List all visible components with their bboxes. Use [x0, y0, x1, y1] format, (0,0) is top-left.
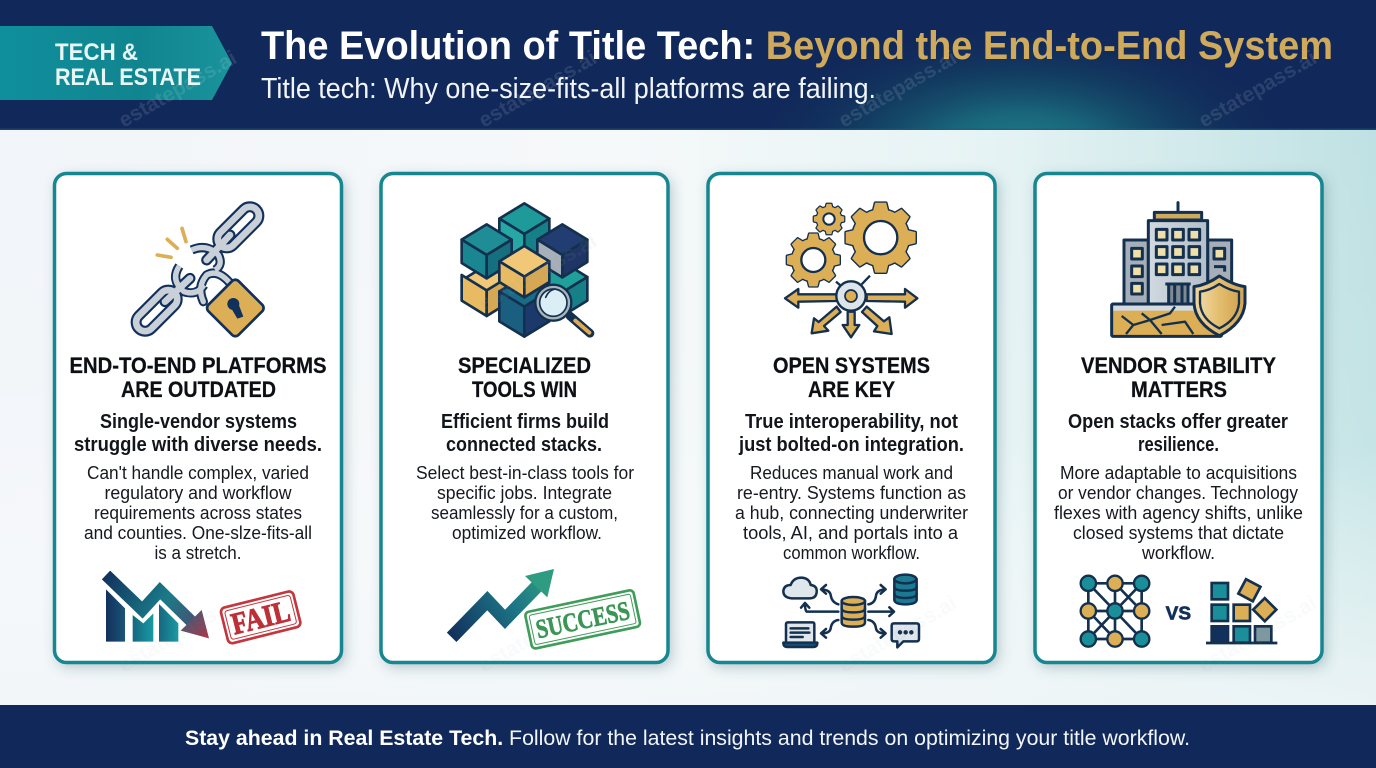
subheading	[1068, 410, 1288, 456]
footer band	[0, 705, 1376, 768]
body text	[735, 462, 968, 563]
watermarks: estatepass.ai	[475, 591, 601, 677]
icon: gears with radiating arrows	[785, 203, 917, 337]
icon: building on cracked ground with shield	[1112, 203, 1245, 336]
stacked blocks	[1206, 579, 1277, 643]
body text: common workflow.	[783, 542, 920, 563]
body text: tools, AI, and portals into a	[743, 522, 959, 543]
badge: tech and real estate: REAL ESTATE	[55, 64, 201, 91]
body text: workflow.	[1141, 542, 1215, 563]
body text: specific jobs. Integrate	[437, 482, 612, 503]
icon: rising arrow with success stamp	[452, 569, 641, 649]
page background	[0, 130, 1376, 705]
footer text: Stay ahead in Real Estate Tech. Follow for the latest insights and trends on optimizing your title workflow.	[185, 727, 1190, 750]
watermarks	[115, 46, 1321, 677]
subheading: connected stacks.	[446, 433, 602, 456]
body text: optimized workflow.	[452, 522, 602, 543]
heading: SPECIALIZED	[458, 353, 591, 378]
subheading: Open stacks offer greater	[1068, 410, 1288, 433]
heading: TOOLS WIN	[472, 377, 577, 402]
icon: network versus blocks	[1081, 576, 1277, 647]
heading: END-TO-END PLATFORMS	[70, 353, 326, 378]
watermarks: estatepass.ai	[115, 591, 241, 677]
connector arrows	[801, 585, 894, 638]
subheading	[441, 410, 609, 456]
heading	[458, 353, 591, 402]
title: The Evolution of Title Tech: Beyond the End-to-End System	[261, 24, 1333, 68]
body text: Select best-in-class tools for	[416, 462, 634, 483]
heading: ARE OUTDATED	[121, 377, 276, 402]
subheading: Efficient firms build	[441, 410, 609, 433]
body text: and counties. One-slze-fits-all	[84, 522, 312, 543]
subtitle: Title tech: Why one-size-fits-all platforms are failing.	[261, 73, 876, 105]
body text: flexes with agency shifts, unlike	[1054, 502, 1303, 523]
body text	[1054, 462, 1303, 563]
body text: Can't handle complex, varied	[87, 462, 309, 483]
subheading	[74, 410, 322, 456]
body text: is a stretch.	[154, 542, 242, 563]
vs label: VS	[1166, 602, 1191, 623]
database gold	[842, 597, 865, 627]
panel: open systems	[708, 174, 995, 662]
watermarks: estatepass.ai	[475, 229, 601, 315]
subheading: just bolted-on integration.	[738, 433, 964, 456]
body text: re-entry. Systems function as	[737, 482, 966, 503]
header band	[0, 0, 1376, 130]
watermarks: estatepass.ai	[475, 46, 601, 132]
body text	[84, 462, 312, 563]
subheading: True interoperability, not	[745, 410, 958, 433]
icon: central database connected to tools	[783, 575, 919, 647]
body text: regulatory and workflow	[104, 482, 292, 503]
body text: More adaptable to acquisitions	[1060, 462, 1297, 483]
heading	[773, 353, 930, 402]
body text: seamlessly for a custom,	[431, 502, 618, 523]
body text	[416, 462, 634, 543]
watermarks: estatepass.ai	[1195, 46, 1321, 132]
subheading	[738, 410, 964, 456]
mesh network	[1081, 576, 1149, 647]
watermarks: estatepass.ai	[115, 46, 241, 132]
body text: closed systems that dictate	[1073, 522, 1284, 543]
badge: tech and real estate: TECH &	[55, 39, 138, 66]
heading: VENDOR STABILITY	[1081, 353, 1276, 378]
subheading: Single-vendor systems	[100, 410, 297, 433]
subheading: struggle with diverse needs.	[74, 433, 322, 456]
icon: modular cubes with magnifier	[462, 203, 590, 337]
subheading: resilience.	[1138, 433, 1219, 456]
badge: tech and real estate	[0, 26, 232, 100]
laptop	[783, 622, 817, 647]
body text: Reduces manual work and	[750, 462, 953, 483]
heading: MATTERS	[1131, 377, 1227, 402]
cloud	[783, 578, 817, 598]
icon: falling chart with fail stamp	[106, 575, 301, 644]
heading	[70, 353, 326, 402]
body text: or vendor changes. Technology	[1058, 482, 1299, 503]
watermarks: estatepass.ai	[835, 46, 961, 132]
heading: ARE KEY	[808, 377, 895, 402]
database teal	[894, 575, 917, 604]
watermarks: estatepass.ai	[835, 591, 961, 677]
icon: falling chart with fail stamp: FAIL	[228, 594, 294, 641]
chat bubble	[892, 623, 919, 647]
panel: specialized tools	[381, 174, 668, 662]
panel: end-to-end platforms	[54, 174, 342, 662]
body text: requirements across states	[94, 502, 302, 523]
heading: OPEN SYSTEMS	[773, 353, 930, 378]
watermarks: estatepass.ai	[1195, 591, 1321, 677]
body text: a hub, connecting underwriter	[735, 502, 968, 523]
icon: broken chain with padlock	[132, 203, 266, 338]
heading	[1081, 353, 1276, 402]
panel: vendor stability	[1035, 174, 1322, 662]
icon: rising arrow with success stamp: SUCCESS	[533, 595, 632, 644]
